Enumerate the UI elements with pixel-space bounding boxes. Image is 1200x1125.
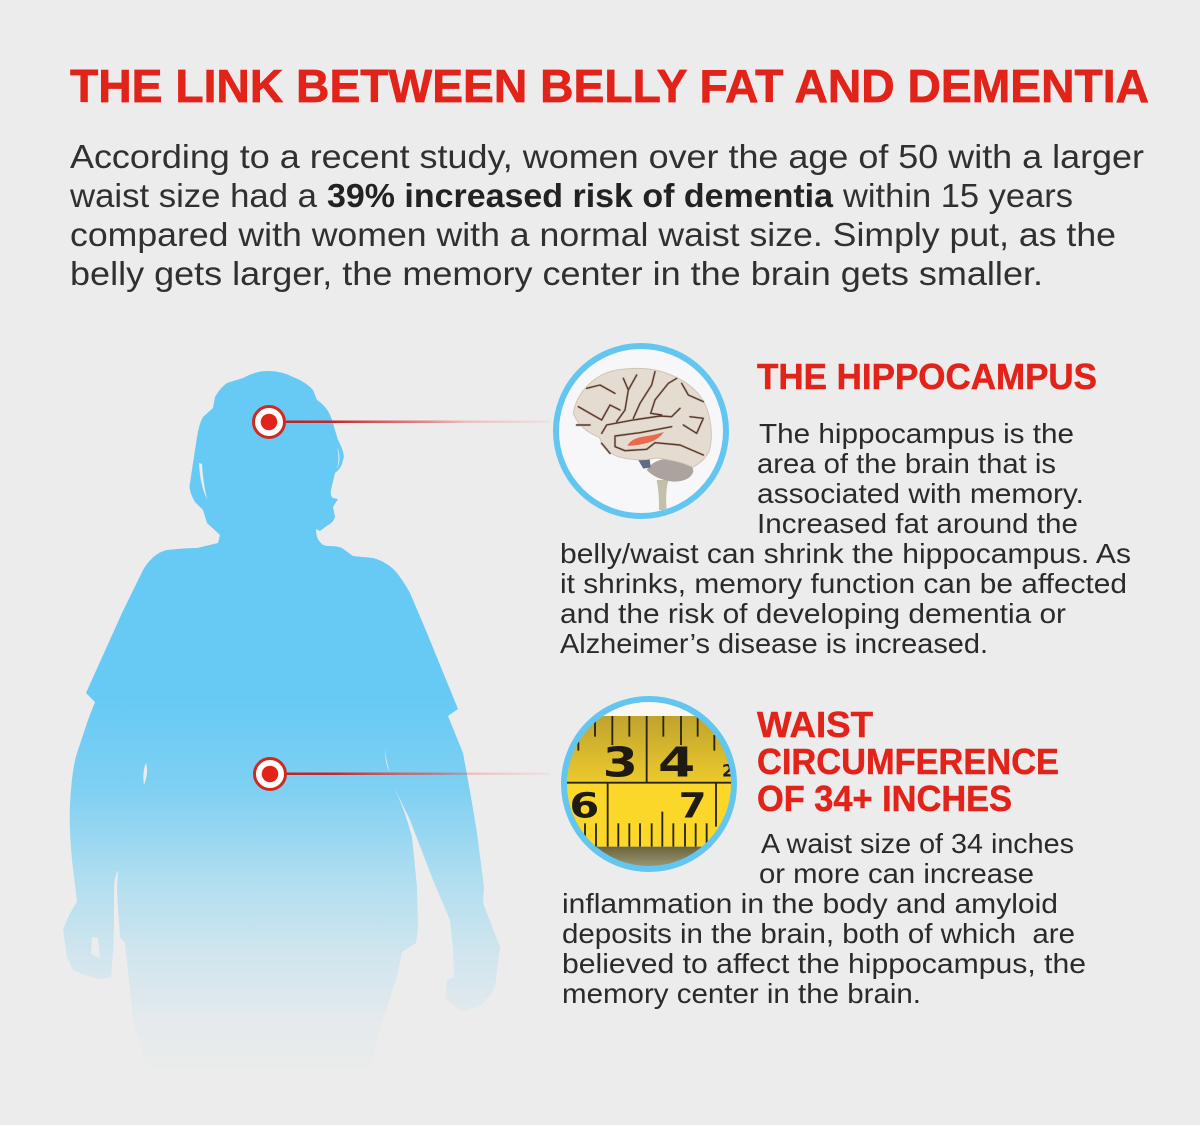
hippocampus text: Alzheimer’s disease is increased. xyxy=(560,628,988,659)
hand gap xyxy=(91,937,100,958)
waist text: A waist size of 34 inches xyxy=(761,828,1074,859)
intro paragraph xyxy=(69,139,1144,293)
hippocampus text: it shrinks, memory function can be affected xyxy=(560,568,1127,599)
icon: measuring tape in circle: 2 xyxy=(722,762,733,781)
hippocampus text: and the risk of developing dementia or xyxy=(560,598,1066,629)
hippocampus text: belly/waist can shrink the hippocampus. As xyxy=(560,538,1131,569)
heading: waist circumference: WAIST xyxy=(757,704,873,745)
silhouette of a woman xyxy=(63,371,500,1090)
connector line to waist xyxy=(285,772,550,775)
hippocampus text: associated with memory. xyxy=(757,478,1084,509)
hippocampus text: area of the brain that is xyxy=(757,448,1056,479)
icon: measuring tape in circle: 3 xyxy=(603,739,638,787)
intro paragraph: within 15 years xyxy=(842,178,1073,215)
hair strand gap, left xyxy=(199,463,207,499)
hippocampus text xyxy=(560,418,1131,659)
waist text: inflammation in the body and amyloid xyxy=(562,888,1058,919)
heading: waist circumference xyxy=(757,704,1059,819)
heading: the hippocampus: THE HIPPOCAMPUS xyxy=(757,356,1097,397)
waist text: deposits in the brain, both of which are xyxy=(562,918,1075,949)
marker: head xyxy=(254,406,284,438)
intro paragraph: belly gets larger, the memory center in the brain gets smaller. xyxy=(70,256,1043,293)
intro paragraph: 39% increased risk of dementia xyxy=(327,178,833,215)
heading: waist circumference: CIRCUMFERENCE xyxy=(757,741,1059,782)
intro paragraph: According to a recent study, women over the age of 50 with a larger xyxy=(70,139,1144,176)
icon: measuring tape in circle: 4 xyxy=(658,739,695,787)
hippocampus text: Increased fat around the xyxy=(757,508,1078,539)
icon: measuring tape in circle xyxy=(560,695,740,875)
icon: measuring tape in circle: 7 xyxy=(679,786,707,826)
intro paragraph: compared with women with a normal waist size. Simply put, as the xyxy=(70,217,1116,254)
intro paragraph: waist size had a xyxy=(69,178,317,215)
heading: waist circumference: OF 34+ INCHES xyxy=(757,778,1012,819)
icon: measuring tape in circle: 6 xyxy=(569,786,599,826)
waist text: believed to affect the hippocampus, the xyxy=(562,948,1086,979)
hippocampus text: The hippocampus is the xyxy=(759,418,1074,449)
arm gap, right xyxy=(385,748,390,772)
icon: brain in circle xyxy=(556,346,726,516)
marker: waist xyxy=(254,758,286,790)
waist text: memory center in the brain. xyxy=(562,978,921,1009)
waist text: or more can increase xyxy=(759,858,1034,889)
waist text xyxy=(562,828,1086,1009)
connector line to brain xyxy=(285,420,550,423)
hair strand gap, right xyxy=(337,447,340,469)
title: THE LINK BETWEEN BELLY FAT AND DEMENTIA xyxy=(70,60,1149,112)
arm gap, left xyxy=(143,763,147,785)
